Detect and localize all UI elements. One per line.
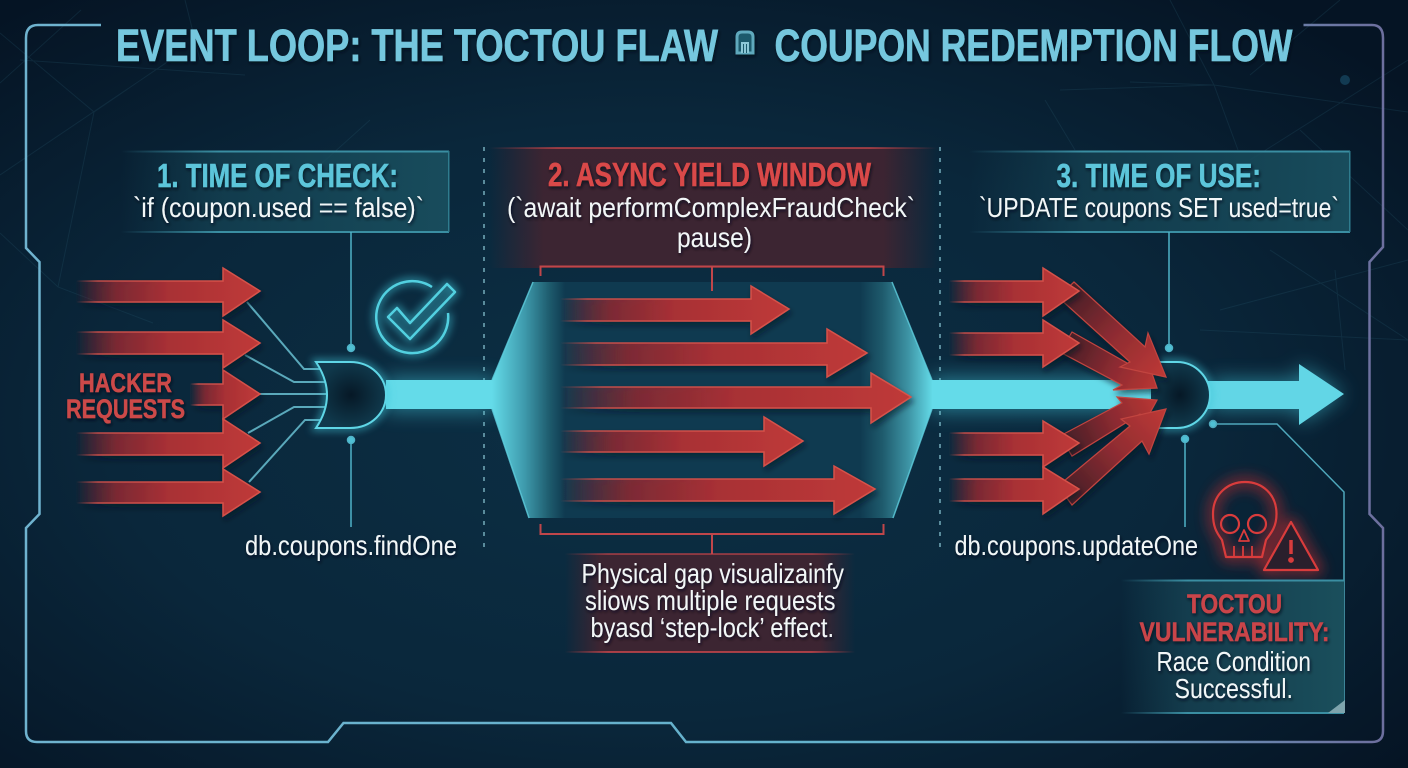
- label: update query: db.coupons.updateOne: [954, 530, 1198, 561]
- bottom bracket: [540, 524, 884, 554]
- panel: physical gap note: [565, 553, 855, 653]
- code: update query: `UPDATE coupons SET used=true`: [979, 192, 1339, 223]
- connector: check to panel: [348, 232, 354, 352]
- signal bus: chamber to gate: [930, 380, 1165, 409]
- input wires: [245, 302, 328, 482]
- text: race condition: Race Condition: [1156, 646, 1311, 677]
- callout leader: [1210, 420, 1344, 712]
- heading: toctou vulnerability: [1140, 589, 1330, 647]
- request arrows: right: [949, 268, 1079, 514]
- text: note: Physical gap visualizainfy: [582, 558, 844, 589]
- text: race condition: [1156, 646, 1311, 704]
- title: [116, 20, 1293, 71]
- label: hacker requests: HACKER: [79, 368, 172, 398]
- code: await pause: (`await performComplexFraudCheck`: [507, 192, 915, 223]
- label: find query: db.coupons.findOne: [245, 530, 457, 561]
- request arrows: yield window: [560, 286, 911, 514]
- signal bus: gate to chamber: [386, 380, 494, 409]
- heading: async yield window: 2. ASYNC YIELD WINDOW: [548, 156, 872, 193]
- request arrows: left: [76, 268, 260, 516]
- panel: time of use: [969, 150, 1350, 233]
- bus glow: [385, 364, 1344, 425]
- logic gate: use: [1150, 362, 1210, 428]
- text: note: [582, 558, 844, 643]
- panel: time of check: [121, 150, 450, 233]
- icon: door lock: [737, 32, 753, 53]
- connector: use to panel: [1166, 232, 1172, 352]
- converging arrows: [1058, 282, 1166, 505]
- logic gate: check: [316, 362, 386, 428]
- heading: toctou vulnerability: TOCTOU: [1187, 589, 1282, 619]
- code: await pause: [507, 192, 915, 253]
- code: coupon check: `if (coupon.used == false)`: [133, 192, 424, 223]
- text: note: byasd ‘step-lock’ effect.: [590, 612, 834, 643]
- label: hacker requests: REQUESTS: [66, 394, 185, 424]
- text: note: sliows multiple requests: [585, 585, 836, 616]
- icon: skull and warning: [1213, 482, 1318, 570]
- output arrow: [1208, 364, 1344, 425]
- heading: toctou vulnerability: VULNERABILITY:: [1140, 617, 1330, 647]
- panel: async yield window: [490, 147, 937, 268]
- label: hacker requests: [66, 368, 185, 424]
- heading: time of use: 3. TIME OF USE:: [1056, 157, 1261, 194]
- top bracket: [540, 266, 884, 291]
- connector: check to query: [348, 436, 354, 527]
- heading: time of check: 1. TIME OF CHECK:: [157, 157, 398, 194]
- panel: toctou vulnerability: [1121, 580, 1345, 714]
- title: EVENT LOOP: THE TOCTOU FLAW: [116, 20, 718, 71]
- code: await pause: pause): [677, 222, 752, 253]
- dashed dividers: [484, 147, 940, 552]
- corner mark: [1328, 700, 1345, 713]
- icon: check mark: [376, 281, 455, 353]
- text: race condition: Successful.: [1174, 673, 1293, 704]
- async window chamber: [492, 282, 932, 518]
- connector: use to query: [1182, 436, 1188, 527]
